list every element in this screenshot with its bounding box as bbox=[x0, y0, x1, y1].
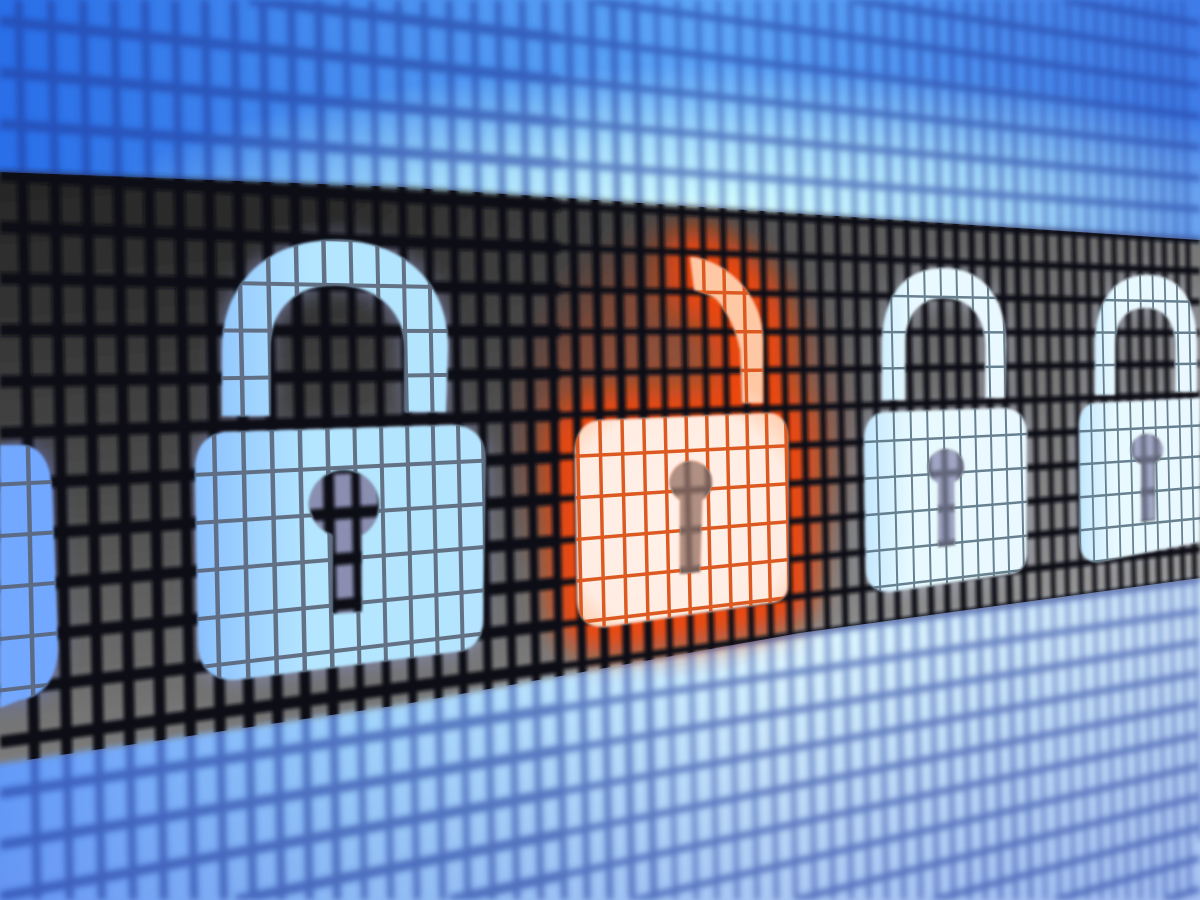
padlocks bbox=[0, 240, 1200, 708]
thin grid lines across red padlock bbox=[575, 258, 788, 627]
icon: white-blue padlock bbox=[864, 268, 1027, 592]
keyhole interiors bbox=[309, 434, 1163, 614]
bottom blue pixel band bbox=[0, 450, 1200, 900]
icon: far right white-blue padlock bbox=[1079, 275, 1200, 562]
thin grid lines across blue padlocks bbox=[0, 240, 485, 697]
top blue pixel band bbox=[0, 0, 1200, 450]
icon: open red padlock body and shackle bbox=[575, 257, 788, 627]
pixel grid over dark band bbox=[0, 172, 1200, 760]
thin grid lines across white padlocks bbox=[864, 268, 1200, 591]
dark central band bbox=[0, 171, 1200, 768]
softened keyhole tint over grid bbox=[670, 434, 1163, 574]
icon: partial blue padlock at left edge bbox=[0, 445, 58, 708]
glow halos behind padlocks bbox=[0, 210, 1200, 708]
icon: large blue padlock bbox=[195, 240, 485, 680]
